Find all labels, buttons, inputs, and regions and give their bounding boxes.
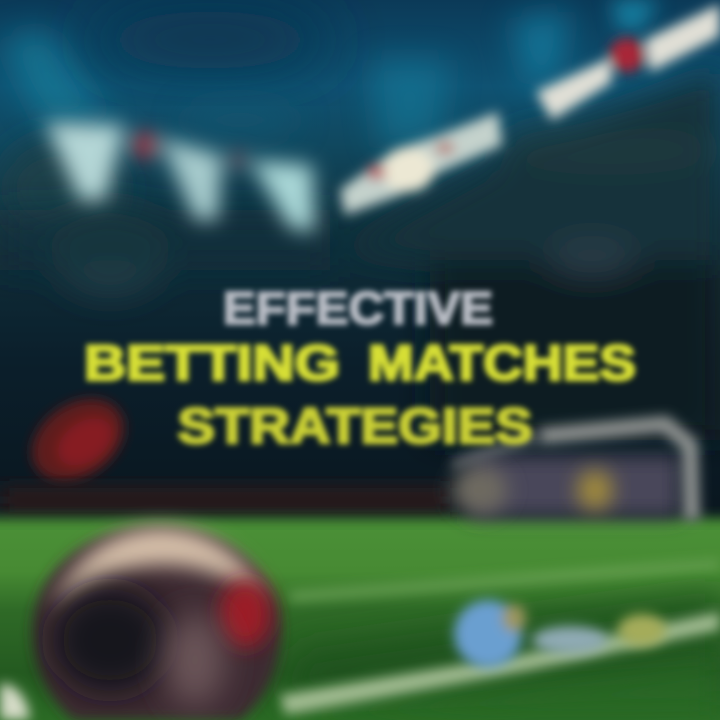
title line 3: STRATEGIES — [178, 398, 532, 454]
horizon crowd band — [0, 488, 450, 512]
stadium roof, dark right side — [0, 70, 720, 440]
title line 2: MATCHES — [368, 335, 636, 391]
title line 2 — [84, 335, 636, 391]
goal — [452, 424, 692, 520]
pitch line — [280, 560, 720, 715]
title — [84, 282, 636, 454]
title line 2: BETTING — [84, 335, 340, 391]
stadium floodlights: right group — [536, 4, 720, 120]
icon: flying american football — [16, 382, 140, 498]
pitch — [0, 518, 720, 720]
icon: foreground soccer ball — [0, 526, 281, 720]
stadium floodlights: centre group — [340, 112, 502, 215]
stadium floodlights: left group — [45, 122, 315, 232]
title line 1: EFFECTIVE — [223, 282, 493, 334]
icon: small blue ball — [454, 600, 666, 668]
